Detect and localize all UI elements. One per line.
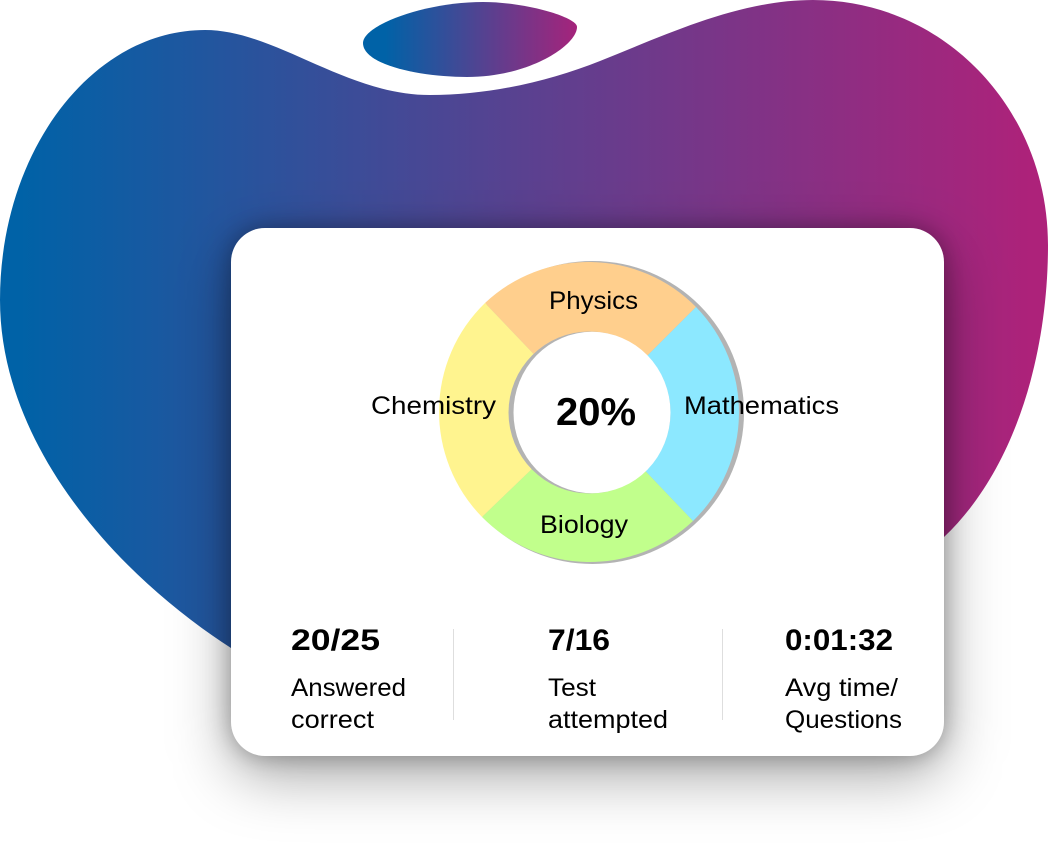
small blob — [363, 2, 577, 77]
segment: Mathematics — [590, 307, 739, 521]
stat: answered correct: correct — [291, 706, 374, 734]
center value: 20% — [556, 391, 636, 434]
result card — [231, 228, 944, 756]
segment: Physics — [485, 262, 696, 413]
card shadow — [231, 228, 944, 776]
segment: Biology — [482, 413, 693, 562]
background blob — [0, 0, 1048, 650]
label: Mathematics: Mathematics — [684, 392, 839, 420]
donut shadow ring — [441, 261, 744, 564]
label: Biology: Biology — [540, 511, 629, 539]
stat: test attempted — [548, 624, 668, 734]
stat: answered correct: 20/25 — [291, 624, 380, 657]
stat: test attempted: attempted — [548, 706, 668, 734]
stat: average time per question — [785, 624, 902, 734]
stat: average time per question: Avg time/ — [785, 674, 898, 702]
stat: average time per question: 0:01:32 — [785, 624, 893, 657]
stat: answered correct — [291, 624, 406, 734]
label: Chemistry: Chemistry — [371, 392, 497, 420]
stat: answered correct: Answered — [291, 674, 406, 702]
stat: test attempted: Test — [548, 674, 596, 702]
label: Physics: Physics — [549, 287, 638, 315]
donut hole — [514, 332, 670, 493]
segment: Chemistry — [439, 303, 590, 517]
inner shadow crescent — [508, 332, 670, 494]
stat: test attempted: 7/16 — [548, 624, 610, 657]
stat: average time per question: Questions — [785, 706, 902, 734]
donut chart — [371, 261, 839, 564]
